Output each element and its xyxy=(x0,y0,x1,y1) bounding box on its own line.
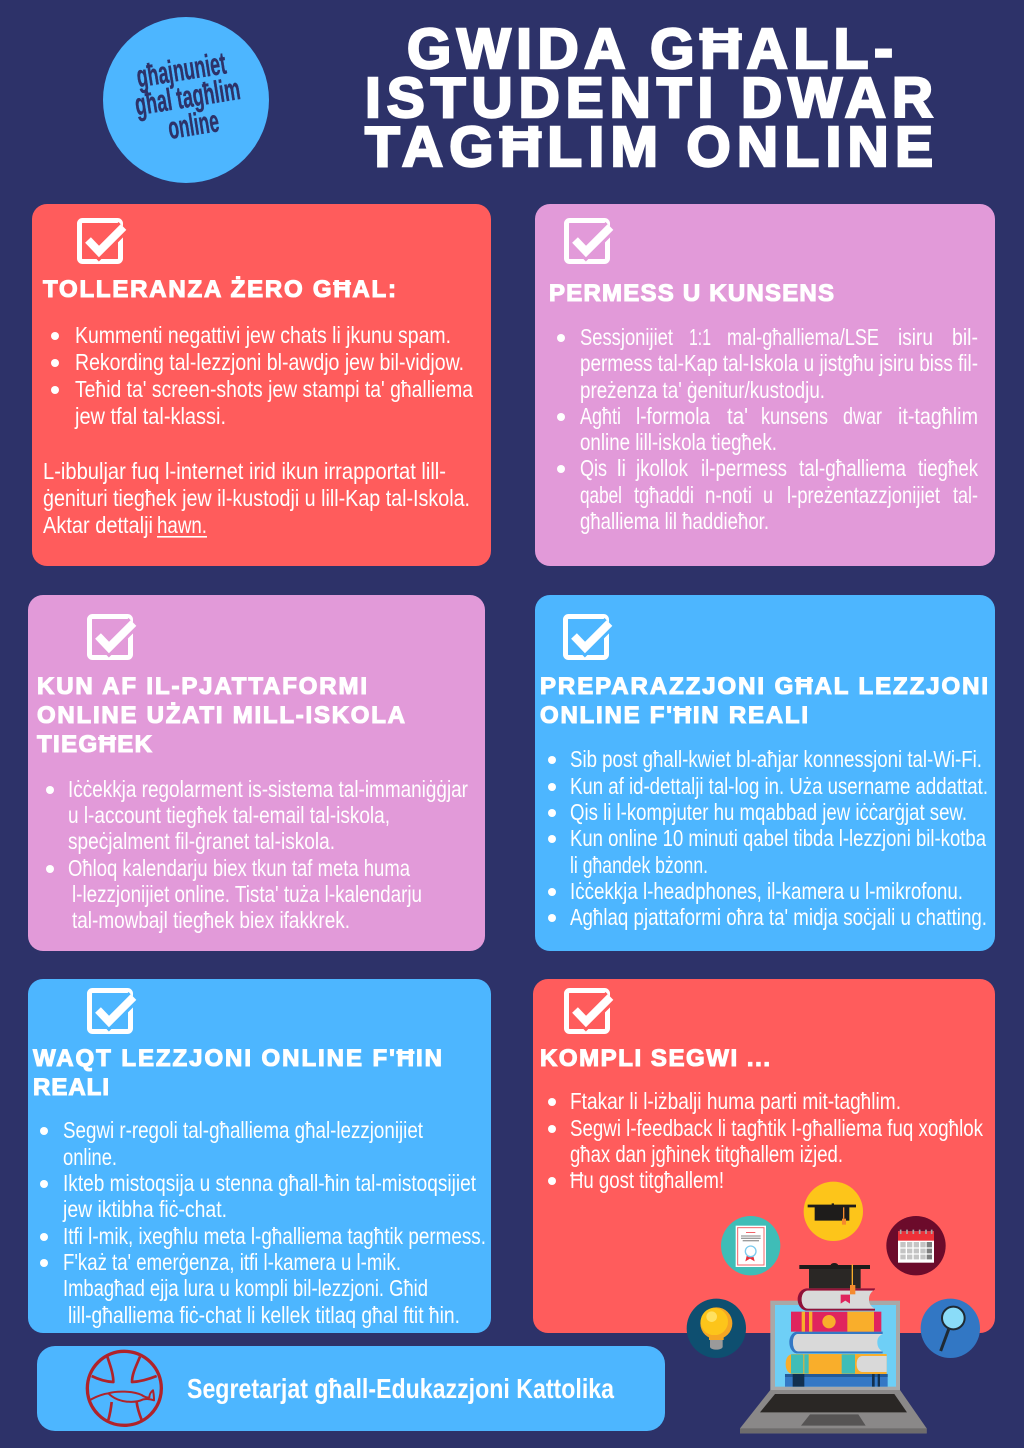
laptop xyxy=(740,1301,927,1433)
bullet list: Ikteb mistoqsija u stenna għall-ħin tal-mistoqsijiet xyxy=(63,1170,476,1196)
bullet list: ta' xyxy=(727,403,748,429)
icon: checkbox xyxy=(90,616,134,658)
heading: WAQT LEZZJONI ONLINE F'ĦIN xyxy=(33,1045,442,1072)
bullet list: bil- xyxy=(952,324,978,350)
heading: PREPARAZZJONI GĦAL LEZZJONI xyxy=(540,673,988,700)
heading: TIEGĦEK xyxy=(37,731,153,758)
bullet list: tgħaddi xyxy=(634,482,694,508)
bullet list: dwar xyxy=(843,403,882,429)
bullet list: Sessjonijiet xyxy=(580,324,673,350)
heading: KUN AF IL-PJATTAFORMI xyxy=(37,673,367,700)
heading: PERMESS U KUNSENS xyxy=(549,280,834,307)
heading: REALI xyxy=(33,1074,109,1101)
panel: know the platforms xyxy=(28,595,485,951)
title: TAGĦLIM ONLINE xyxy=(365,115,933,179)
badge: help with online learning: għajnuniet xyxy=(134,46,228,94)
bullet list: u xyxy=(763,482,773,508)
bullet list xyxy=(51,322,473,429)
bullet list: Iċċekkja regolarment is-sistema tal-immaniġġjar xyxy=(68,776,468,802)
panel: keep going xyxy=(533,979,995,1333)
heading: TOLLERANZA ŻERO GĦAL: xyxy=(43,276,396,303)
bullet list: Oħloq kalendarju biex tkun taf meta huma xyxy=(68,855,410,881)
text block: reporting bullying: L-ibbuljar fuq l-internet irid ikun irrapportat lill- xyxy=(43,458,446,484)
bullet list: Ħu gost titgħallem! xyxy=(570,1167,724,1193)
bullet list: speċjalment fil-ġranet tal-iskola. xyxy=(68,828,335,854)
bullet list: qabel xyxy=(580,482,622,508)
text block: reporting bullying: hawn. xyxy=(157,512,207,538)
bullet list xyxy=(548,1088,983,1193)
bullet list: l-lezzjonijiet online. Tista' tuża l-kalendarju xyxy=(72,881,422,907)
bullet list: kunsens xyxy=(761,403,828,429)
bullet list: Segwi r-regoli tal-għalliema għal-lezzjonijiet xyxy=(63,1117,423,1143)
bullet list: tal-għalliema xyxy=(799,455,906,481)
bullet list: tal-mowbajl tiegħek biex ifakkrek. xyxy=(72,907,350,933)
bullet list: li xyxy=(617,455,626,481)
icon: certificate xyxy=(721,1216,780,1275)
bullet list: lill-għalliema fiċ-chat li kellek titlaq għal ftit ħin. xyxy=(68,1302,460,1328)
panel: preparing for real-time lessons xyxy=(535,595,995,951)
heading xyxy=(540,673,988,729)
bullet list: mal-għalliema/LSE xyxy=(727,324,879,350)
icon: light bulb xyxy=(687,1299,746,1358)
heading xyxy=(37,673,405,758)
panel: permission and consent xyxy=(535,204,995,566)
bullet list: tiegħek xyxy=(918,455,978,481)
bullet list xyxy=(557,324,978,534)
bullet list: l-formola xyxy=(636,403,710,429)
badge: help with online learning: għal tagħlim xyxy=(132,71,243,122)
bullet list: 1:1 xyxy=(689,324,711,350)
panel: during real-time lessons xyxy=(28,979,491,1333)
bullet list: Imbagħad ejja lura u kompli bil-lezzjoni. Għid xyxy=(63,1275,428,1301)
bullet list: Kummenti negattivi jew chats li jkunu spam. xyxy=(75,322,451,348)
icon: checkbox xyxy=(90,990,134,1032)
bullet list: tal- xyxy=(953,482,978,508)
bullet list: preżenza ta' ġenitur/kustodju. xyxy=(580,377,825,403)
bullet list: Qis xyxy=(580,455,607,481)
title xyxy=(365,17,933,179)
bullet list: li għandek bżonn. xyxy=(570,852,708,878)
bullet list: online. xyxy=(63,1144,117,1170)
heading: ONLINE UŻATI MILL-ISKOLA xyxy=(37,702,405,729)
footer text: Segretarjat għall-Edukazzjoni Kattolika xyxy=(187,1373,614,1404)
stack of books with graduation cap xyxy=(785,1263,888,1387)
icon: checkbox xyxy=(80,220,124,262)
heading xyxy=(33,1045,442,1101)
bullet list: jkollok xyxy=(635,455,688,481)
bullet list: jew iktibha fiċ-chat. xyxy=(62,1196,227,1222)
text block: reporting bullying: Aktar dettalji xyxy=(43,512,153,538)
bullet list: it-tagħlim xyxy=(898,403,978,429)
icon: calendar xyxy=(886,1216,946,1275)
bullet list: l-preżentazzjonijiet xyxy=(787,482,940,508)
bullet list: isiru xyxy=(898,324,933,350)
text block: reporting bullying: ġenituri tiegħek jew il-kustodji u lill-Kap tal-Iskola. xyxy=(43,485,470,511)
icon: secretariat logo xyxy=(87,1351,161,1425)
bullet list xyxy=(46,776,468,933)
bullet list: Itfi l-mik, ixegħlu meta l-għalliema tagħtik permess. xyxy=(63,1223,486,1249)
footer bar xyxy=(37,1346,665,1431)
badge: help with online learning xyxy=(103,17,269,183)
title: GWIDA GĦALL- xyxy=(407,17,893,81)
bullet list: Rekording tal-lezzjoni bl-awdjo jew bil-vidjow. xyxy=(75,349,464,375)
icon: checkbox xyxy=(566,990,610,1032)
heading: KOMPLI SEGWI ... xyxy=(540,1045,770,1072)
bullet list: għalliema lil ħaddieħor. xyxy=(580,508,769,534)
panel: zero tolerance xyxy=(32,204,491,566)
bullet list: Ftakar li l-iżbalji huma parti mit-tagħlim. xyxy=(570,1088,901,1114)
badge: help with online learning: online xyxy=(166,103,221,146)
bullet list: u l-account tiegħek tal-email tal-iskola, xyxy=(68,802,390,828)
icon: checkbox xyxy=(566,220,610,262)
bullet list: il-permess xyxy=(701,455,787,481)
bullet list: n-noti xyxy=(705,482,752,508)
bullet list: Agħti xyxy=(580,403,621,429)
title: ISTUDENTI DWAR xyxy=(365,66,933,130)
icon: graduation cap xyxy=(804,1182,863,1241)
text block: reporting bullying xyxy=(43,458,470,538)
bullet list: Teħid ta' screen-shots jew stampi ta' għalliema xyxy=(75,376,473,402)
bullet list: online lill-iskola tiegħek. xyxy=(580,429,777,455)
icon: magnifying glass xyxy=(921,1299,980,1358)
icon: checkbox xyxy=(566,616,610,658)
bullet list xyxy=(40,1117,486,1328)
bullet list: jew tfal tal-klassi. xyxy=(74,403,226,429)
heading: ONLINE F'ĦIN REALI xyxy=(540,702,808,729)
bullet list: F'każ ta' emerġenza, itfi l-kamera u l-mik. xyxy=(63,1249,401,1275)
bullet list xyxy=(548,746,988,930)
illustration: laptop with books and learning icons xyxy=(687,1182,980,1433)
bullet list: għax dan jgħinek titgħallem iżjed. xyxy=(570,1141,843,1167)
